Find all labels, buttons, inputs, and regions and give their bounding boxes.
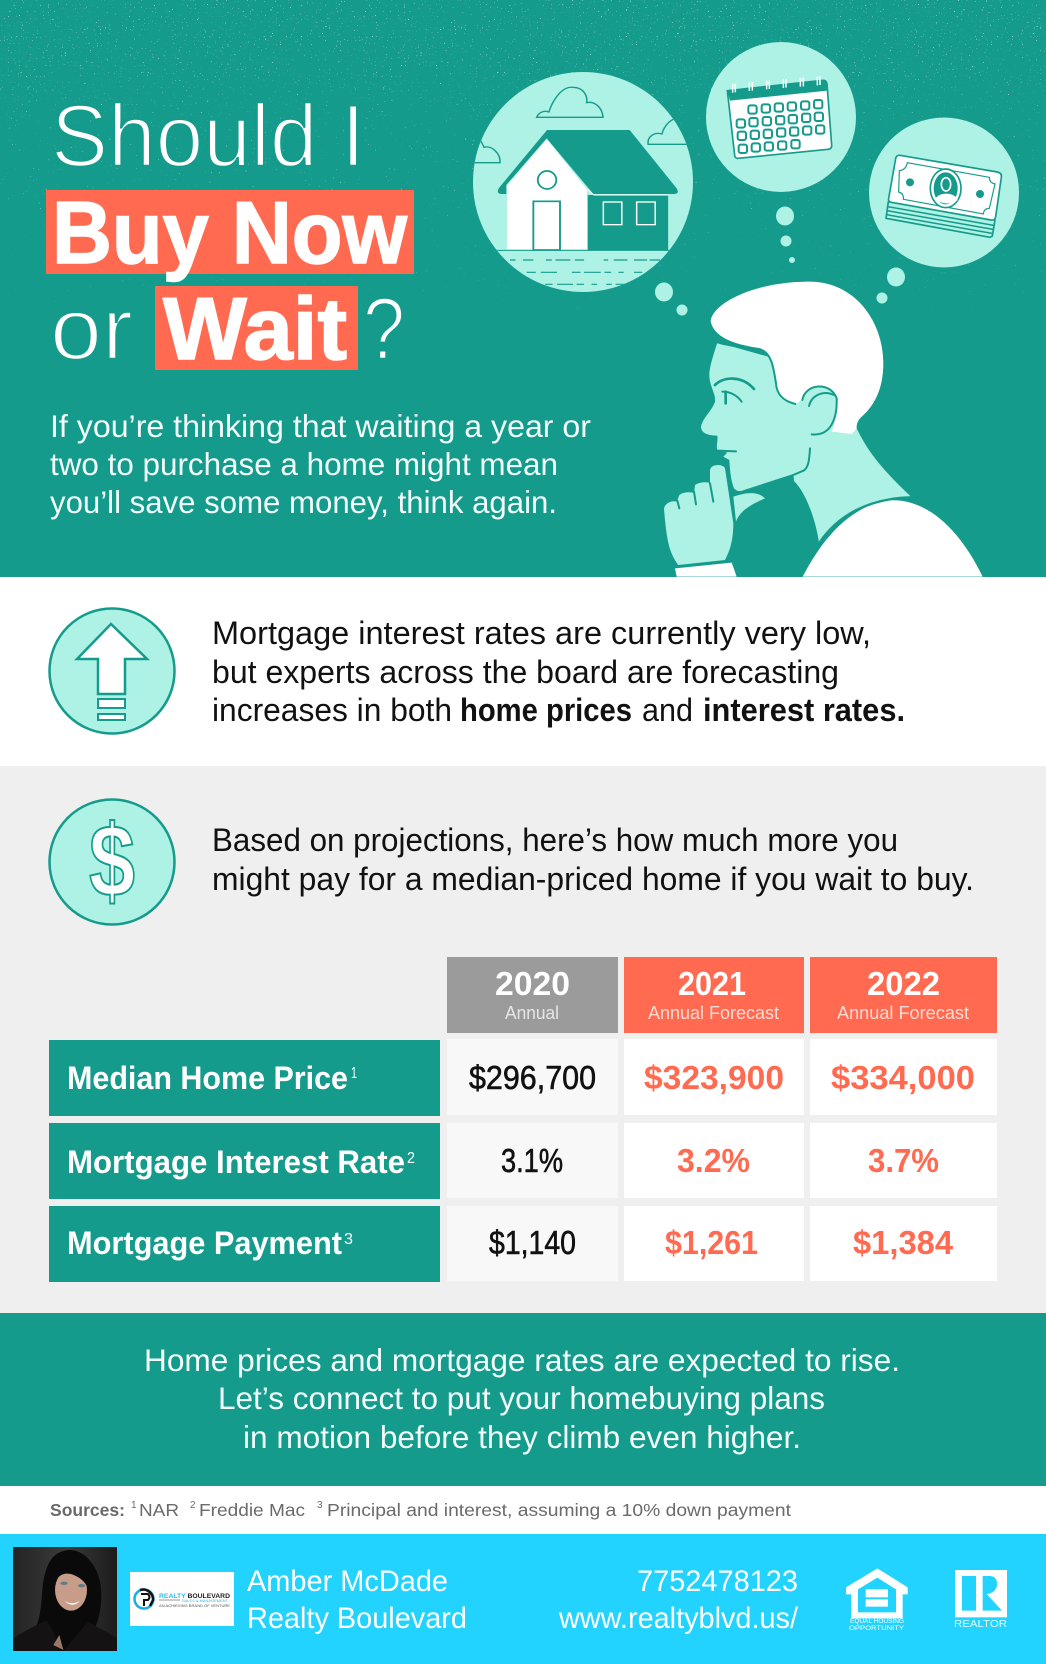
title: Buy Now xyxy=(52,183,408,282)
row: mortgage interest rate: 3.2% xyxy=(677,1142,750,1179)
contact details: 7752478123 xyxy=(637,1565,798,1598)
row: mortgage payment: Mortgage Payment xyxy=(67,1225,342,1261)
sources: Principal and interest, assuming a 10% down payment xyxy=(327,1500,791,1520)
row: median home price xyxy=(49,1039,997,1116)
row: mortgage interest rate: Mortgage Interest Rate xyxy=(67,1144,405,1180)
sources: Sources: xyxy=(50,1500,125,1520)
column header: 2020 xyxy=(447,957,618,1033)
row: median home price: $323,900 xyxy=(644,1059,784,1096)
panel: projections xyxy=(0,766,1046,1313)
icon: calendar thought bubble xyxy=(706,42,856,192)
column header: 2020: 2020 xyxy=(495,965,570,1002)
title xyxy=(46,86,414,378)
row: mortgage payment: $1,140 xyxy=(489,1224,576,1261)
panel: mortgage rates note xyxy=(0,577,1046,766)
panel: agent footer xyxy=(0,1534,1046,1664)
sources: 2 xyxy=(190,1500,196,1511)
text: projections intro: Based on projections, here’s how much more you xyxy=(212,822,898,858)
company logo xyxy=(130,1572,234,1626)
intro text: two to purchase a home might mean xyxy=(50,446,558,482)
column header: 2021: Annual Forecast xyxy=(648,1003,779,1023)
text: rates forecast: but experts across the board are forecasting xyxy=(212,654,839,690)
row: mortgage payment: 3 xyxy=(344,1231,353,1248)
text: projections intro xyxy=(212,822,974,897)
icon: up arrow xyxy=(50,608,174,734)
sources: 3 xyxy=(317,1500,323,1511)
column header: 2021: 2021 xyxy=(678,965,746,1002)
panel: call to action: in motion before they climb even higher. xyxy=(243,1419,801,1455)
icon: dollar sign: $ xyxy=(89,804,135,918)
agent photo xyxy=(13,1547,117,1651)
text: rates forecast: and xyxy=(642,692,693,728)
panel: hero background xyxy=(0,0,1046,577)
agent details: Amber McDade xyxy=(247,1565,448,1598)
row: median home price: 1 xyxy=(351,1065,357,1082)
sources: 1 xyxy=(131,1500,137,1511)
row: mortgage interest rate: 3.1% xyxy=(501,1142,563,1179)
icon: logo mark xyxy=(134,1590,154,1608)
agent details xyxy=(247,1565,467,1635)
column header: 2022 xyxy=(810,957,997,1033)
text: rates forecast: Mortgage interest rates are currently very low, xyxy=(212,615,871,651)
icon: equal housing opportunity xyxy=(846,1568,908,1632)
company logo: REALTY BOULEVARD xyxy=(159,1593,230,1600)
company logo: AN ACHIEVING BRAND OF VENTURE xyxy=(159,1604,231,1608)
icon: equal housing opportunity: EQUAL HOUSING xyxy=(850,1618,904,1625)
icon: realtor mark: REALTOR xyxy=(954,1618,1007,1630)
row: mortgage interest rate: 2 xyxy=(407,1150,415,1167)
sources: NAR xyxy=(139,1500,179,1520)
text: rates forecast: increases in both xyxy=(212,692,452,728)
thought bubbles xyxy=(655,206,905,316)
title: ? xyxy=(363,279,405,378)
text: projections intro: might pay for a median-priced home if you wait to buy. xyxy=(212,861,974,897)
row: median home price: $296,700 xyxy=(469,1059,596,1096)
text: rates forecast xyxy=(212,615,905,728)
icon: money thought bubble xyxy=(869,118,1019,268)
panel: call to action xyxy=(0,1313,1046,1486)
text: rates forecast: interest rates. xyxy=(703,692,905,728)
sources: Freddie Mac xyxy=(199,1500,305,1520)
row: median home price: $334,000 xyxy=(831,1059,975,1096)
row: mortgage payment: $1,384 xyxy=(853,1224,954,1261)
sources xyxy=(0,1486,1046,1534)
title: Wait xyxy=(163,279,347,378)
intro text xyxy=(50,408,591,520)
column header: 2022: 2022 xyxy=(867,965,940,1002)
row: mortgage payment: $1,261 xyxy=(665,1224,758,1261)
column header: 2022: Annual Forecast xyxy=(837,1003,969,1023)
icon: realtor mark xyxy=(954,1570,1007,1630)
row: median home price: Median Home Price xyxy=(67,1060,348,1096)
contact details xyxy=(558,1565,799,1635)
illustration: thinking man xyxy=(664,282,983,577)
title: or xyxy=(50,279,133,378)
agent details: Realty Boulevard xyxy=(247,1602,467,1635)
company logo: SALES & MANAGEMENT xyxy=(182,1598,229,1603)
column header: 2021 xyxy=(624,957,804,1033)
text: rates forecast: home prices xyxy=(460,692,632,728)
panel: call to action: Home prices and mortgage rates are expected to rise. xyxy=(144,1342,900,1378)
icon: house thought bubble xyxy=(460,72,699,292)
row: mortgage interest rate xyxy=(49,1123,997,1199)
row: mortgage payment xyxy=(49,1206,997,1282)
intro text: If you’re thinking that waiting a year or xyxy=(50,408,591,444)
title: Should I xyxy=(51,86,365,185)
icon: equal housing opportunity: OPPORTUNITY xyxy=(849,1625,905,1632)
intro text: you’ll save some money, think again. xyxy=(50,484,557,520)
row: mortgage interest rate: 3.7% xyxy=(868,1142,939,1179)
column header: 2020: Annual xyxy=(505,1003,559,1023)
contact details: www.realtyblvd.us/ xyxy=(558,1602,799,1635)
icon: dollar sign xyxy=(50,800,174,924)
table: projections xyxy=(49,957,997,1282)
panel: call to action: Let’s connect to put your homebuying plans xyxy=(218,1380,825,1416)
